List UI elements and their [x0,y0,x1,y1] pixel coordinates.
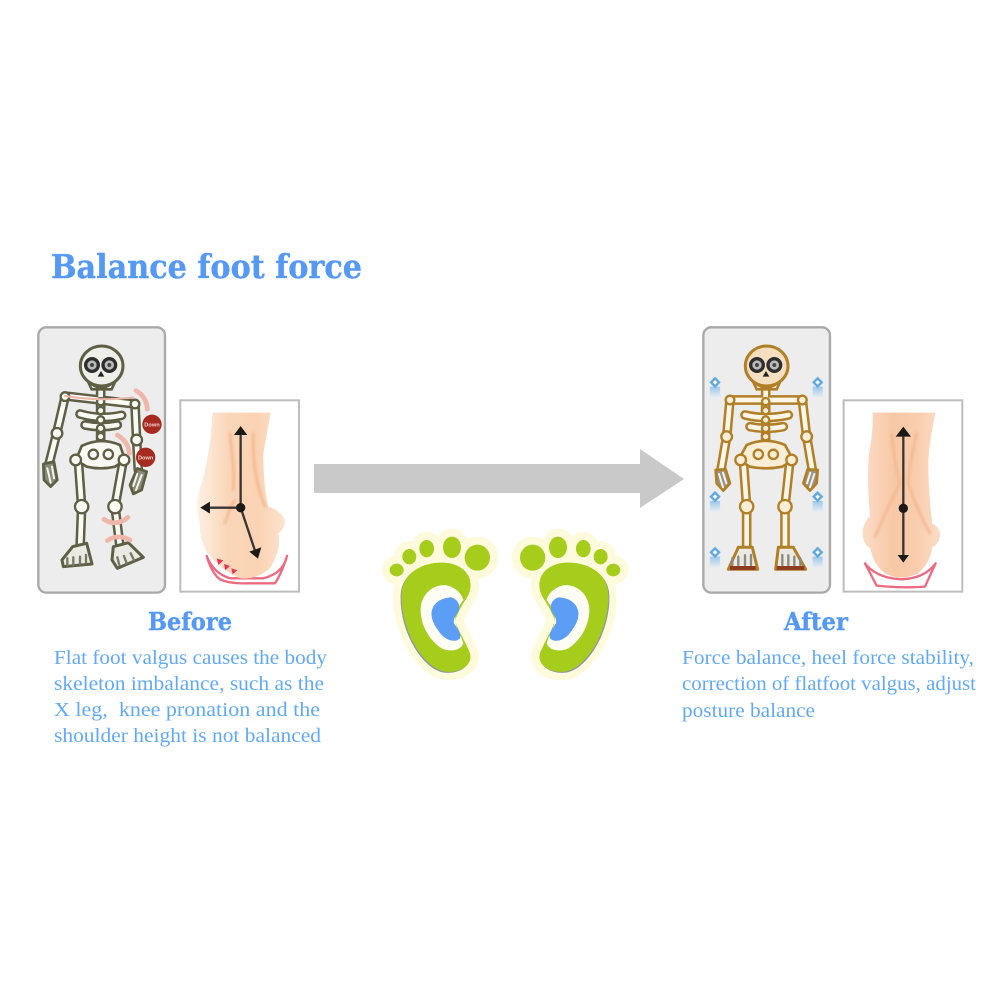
text block: before [54,647,327,747]
text block: after: posture balance [682,700,815,722]
hands [716,469,818,491]
badge: down 2: Down [138,455,154,461]
feet [62,543,143,568]
arrow: balanced force [896,427,911,563]
arrows: uneven force [200,426,261,559]
level markers [709,377,823,568]
panel: before heel [180,400,299,592]
heading: after: After [783,607,848,636]
joints and spine beads [721,396,812,513]
footprint: right [520,537,620,673]
text block: after: correction of flatfoot valgus, adjust [682,673,976,695]
badge: down 1 [142,415,162,434]
heel: before [197,413,285,579]
text block: before: Flat foot valgus causes the body [54,647,327,669]
heel: after [863,413,940,577]
text block: before: shoulder height is not balanced [54,725,321,747]
text block: before: skeleton imbalance, such as the [54,673,324,695]
arrow: before to after [314,449,684,508]
insole: after [865,563,936,587]
panel: before skeleton [38,327,165,593]
footprints [390,537,620,673]
pelvis [76,441,125,468]
footprint: left [390,537,490,673]
text block: after: Force balance, heel force stability, [682,647,974,669]
insole: before [207,556,287,583]
badge: down 1: Down [144,422,160,428]
hands [43,462,147,494]
panel: after heel [844,400,962,592]
pink correction marks [65,391,147,541]
title: Balance foot force [51,247,362,286]
soles [730,566,804,570]
skeleton: before [43,346,147,568]
heading: before: Before [148,607,232,636]
feet [728,547,806,569]
text block: before: X leg, knee pronation and the [54,699,320,721]
skeleton: after [716,346,818,570]
skull [87,380,116,389]
pelvis [738,441,793,468]
pressure marks [217,559,237,574]
text block: after [682,647,976,722]
skull [752,380,781,389]
badge: down 2 [136,448,155,467]
panel: after skeleton [703,327,830,593]
joints and spine beads [52,392,142,513]
